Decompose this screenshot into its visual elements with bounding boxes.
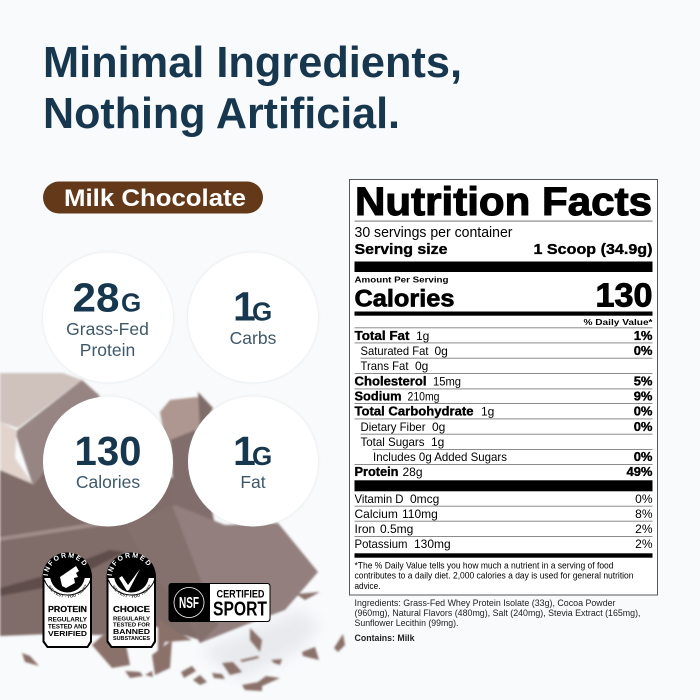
ingredients text: Ingredients: Grass-Fed Whey Protein Isolate (33g), Cocoa Powder [354, 598, 616, 608]
nutrient rows: Sodium [354, 388, 402, 403]
nutrient rows: 1g [416, 329, 429, 343]
light broken edge [0, 422, 33, 484]
nutrient rows: Trans Fat [360, 359, 409, 373]
table reflection [200, 610, 320, 680]
stat circle: 130 calories: 130 [74, 428, 142, 474]
vitamins and minerals: 130mg [414, 537, 451, 551]
nutrient rows: 0g [415, 359, 428, 373]
vitamins and minerals: 110mg [402, 507, 438, 521]
stat circle: 1g fat: 1 [233, 428, 256, 474]
nutrient rows: 49% [626, 464, 653, 479]
vitamins and minerals: 2% [635, 522, 653, 536]
title: Nothing Artificial. [43, 89, 400, 138]
nutrient rows: 1g [431, 435, 444, 449]
chocolate dark body left [0, 430, 200, 640]
nutrient rows: Total Fat [354, 328, 410, 343]
stat circle: 1g fat: Fat [240, 472, 266, 492]
footnote: contributes to a daily diet. 2,000 calories a day is used for general nutrition [354, 571, 634, 581]
footnote: advice. [354, 581, 380, 591]
badge: Informed Protein: REGULARLY [48, 616, 88, 624]
top fragment light [160, 397, 205, 445]
fragment neck [170, 430, 215, 525]
footnote [354, 560, 634, 591]
crumbs [22, 592, 345, 691]
badge: Informed Protein: INFORMED [43, 552, 87, 576]
nutrient rows: 1g [481, 404, 494, 418]
nutrient rows: 15mg [433, 374, 461, 388]
calories block: Calories [354, 286, 454, 312]
vitamins and minerals: 8% [635, 507, 653, 521]
stat circle: 1g carbs: G [252, 296, 272, 326]
calories block [354, 274, 653, 327]
title: Minimal Ingredients, [43, 38, 462, 87]
dark groove [0, 550, 125, 596]
vitamins and minerals: Vitamin D [354, 492, 404, 506]
right chocolate slab [125, 505, 318, 643]
stat circle: 28g protein [43, 252, 173, 382]
badge: NSF Certified Sport: CERTIFIED [216, 588, 265, 600]
nutrient rows: 0g [434, 344, 448, 358]
stat circle: 1g carbs: Carbs [230, 328, 277, 348]
nutrient rows: 0% [634, 343, 653, 358]
badge: Informed Protein: WE TEST · YOU TRUST [48, 584, 87, 598]
nutrient rows: Protein [354, 464, 399, 479]
ingredients text: (960mg), Natural Flavors (480mg), Salt (240mg), Stevia Extract (165mg), [354, 608, 640, 618]
nutrient rows: 0% [634, 404, 653, 418]
badge: Informed Choice [106, 552, 156, 648]
servings block: Serving size [354, 241, 448, 258]
servings block [354, 220, 653, 272]
nutrient rows: Includes 0g Added Sugars [373, 450, 507, 464]
lighter seam line [0, 518, 126, 541]
badge: Informed Choice: REGULARLY [113, 616, 150, 622]
vitamins and minerals: Potassium [354, 537, 408, 551]
upper slab side face [15, 380, 100, 486]
stat circle: 28g protein: Grass-Fed [66, 319, 149, 339]
nutrient rows: 28g [402, 465, 423, 479]
servings block: 30 servings per container [354, 225, 513, 241]
nutrient rows: Total Sugars [360, 435, 424, 449]
vitamins and minerals: Calcium [354, 507, 398, 521]
vitamins and minerals: 2% [635, 537, 653, 551]
badge: NSF Certified Sport: SPORT [213, 598, 267, 620]
flavor pill: Milk Chocolate: Milk Chocolate [64, 185, 246, 212]
stat circle: 130 calories [43, 396, 173, 526]
upper slab top face [0, 373, 82, 428]
flavor pill: Milk Chocolate [43, 182, 263, 214]
stat circle: 28g protein: Protein [80, 340, 135, 360]
top fragment dark tip [198, 392, 213, 432]
badge: Informed Choice: WE TEST · YOU TRUST [112, 584, 151, 598]
badge: Informed Choice: INFORMED [107, 552, 151, 576]
badge: NSF Certified Sport: NSF [179, 595, 199, 612]
vitamins and minerals: 0% [635, 492, 653, 506]
nutrient rows: 5% [634, 373, 653, 388]
nutrient rows: Total Carbohydrate [354, 404, 474, 418]
nutrient rows: 0% [634, 419, 653, 434]
badge: Informed Choice: SUBSTANCES [113, 636, 151, 642]
stat circle: 1g fat: G [252, 441, 272, 471]
nutrient rows [354, 327, 653, 491]
allergen statement: Contains: Milk [354, 633, 415, 643]
badge: Informed Protein [42, 552, 92, 648]
ingredients text: Sunflower Lecithin (99mg). [354, 618, 458, 628]
chocolate photo backdrop [0, 373, 345, 691]
vitamins and minerals [354, 492, 653, 558]
nutrient rows: 1% [634, 328, 653, 343]
calories block: % Daily Value* [584, 317, 653, 327]
badge: NSF Certified Sport [168, 583, 270, 622]
badge: Informed Protein: PROTEIN [48, 605, 87, 614]
stat circle: 130 calories: Calories [76, 472, 140, 492]
nutrient rows: 0% [634, 449, 653, 464]
vitamins and minerals: 0.5mg [380, 522, 413, 536]
nutrient rows: Dietary Fiber [360, 420, 426, 434]
heading: Nutrition Facts: Nutrition Facts [355, 180, 652, 224]
stat circle: 1g fat [188, 396, 318, 526]
stat circle: 28g protein: G [121, 288, 141, 318]
nutrient rows: 9% [634, 388, 653, 403]
stat circle: 1g carbs [188, 252, 318, 382]
badge: Informed Choice: BANNED [113, 629, 150, 636]
stat circle: 1g carbs: 1 [233, 284, 256, 330]
badge: Informed Protein: TESTED AND [48, 624, 87, 630]
badge: Informed Choice: TESTED FOR [113, 622, 150, 628]
calories block: 130 [596, 276, 652, 314]
ingredients text [354, 598, 640, 628]
stat circle: 28g protein: 28 [72, 274, 120, 320]
title [43, 38, 462, 138]
nutrient rows: Cholesterol [354, 373, 426, 388]
footnote: *The % Daily Value tells you how much a nutrient in a serving of food [354, 560, 614, 570]
calories block: Amount Per Serving [354, 274, 448, 284]
nutrient rows: Saturated Fat [360, 344, 429, 358]
slab inner band [125, 505, 218, 643]
vitamins and minerals: Iron [354, 522, 375, 536]
nutrient rows: 210mg [408, 389, 440, 403]
badge: Informed Choice: CHOICE [113, 605, 151, 614]
servings block: 1 Scoop (34.9g) [534, 241, 653, 258]
vitamins and minerals: 0mcg [410, 492, 439, 506]
badge: Informed Protein: VERIFIED [48, 631, 87, 638]
nutrition facts panel [350, 180, 658, 595]
nutrient rows: 0g [432, 420, 445, 434]
